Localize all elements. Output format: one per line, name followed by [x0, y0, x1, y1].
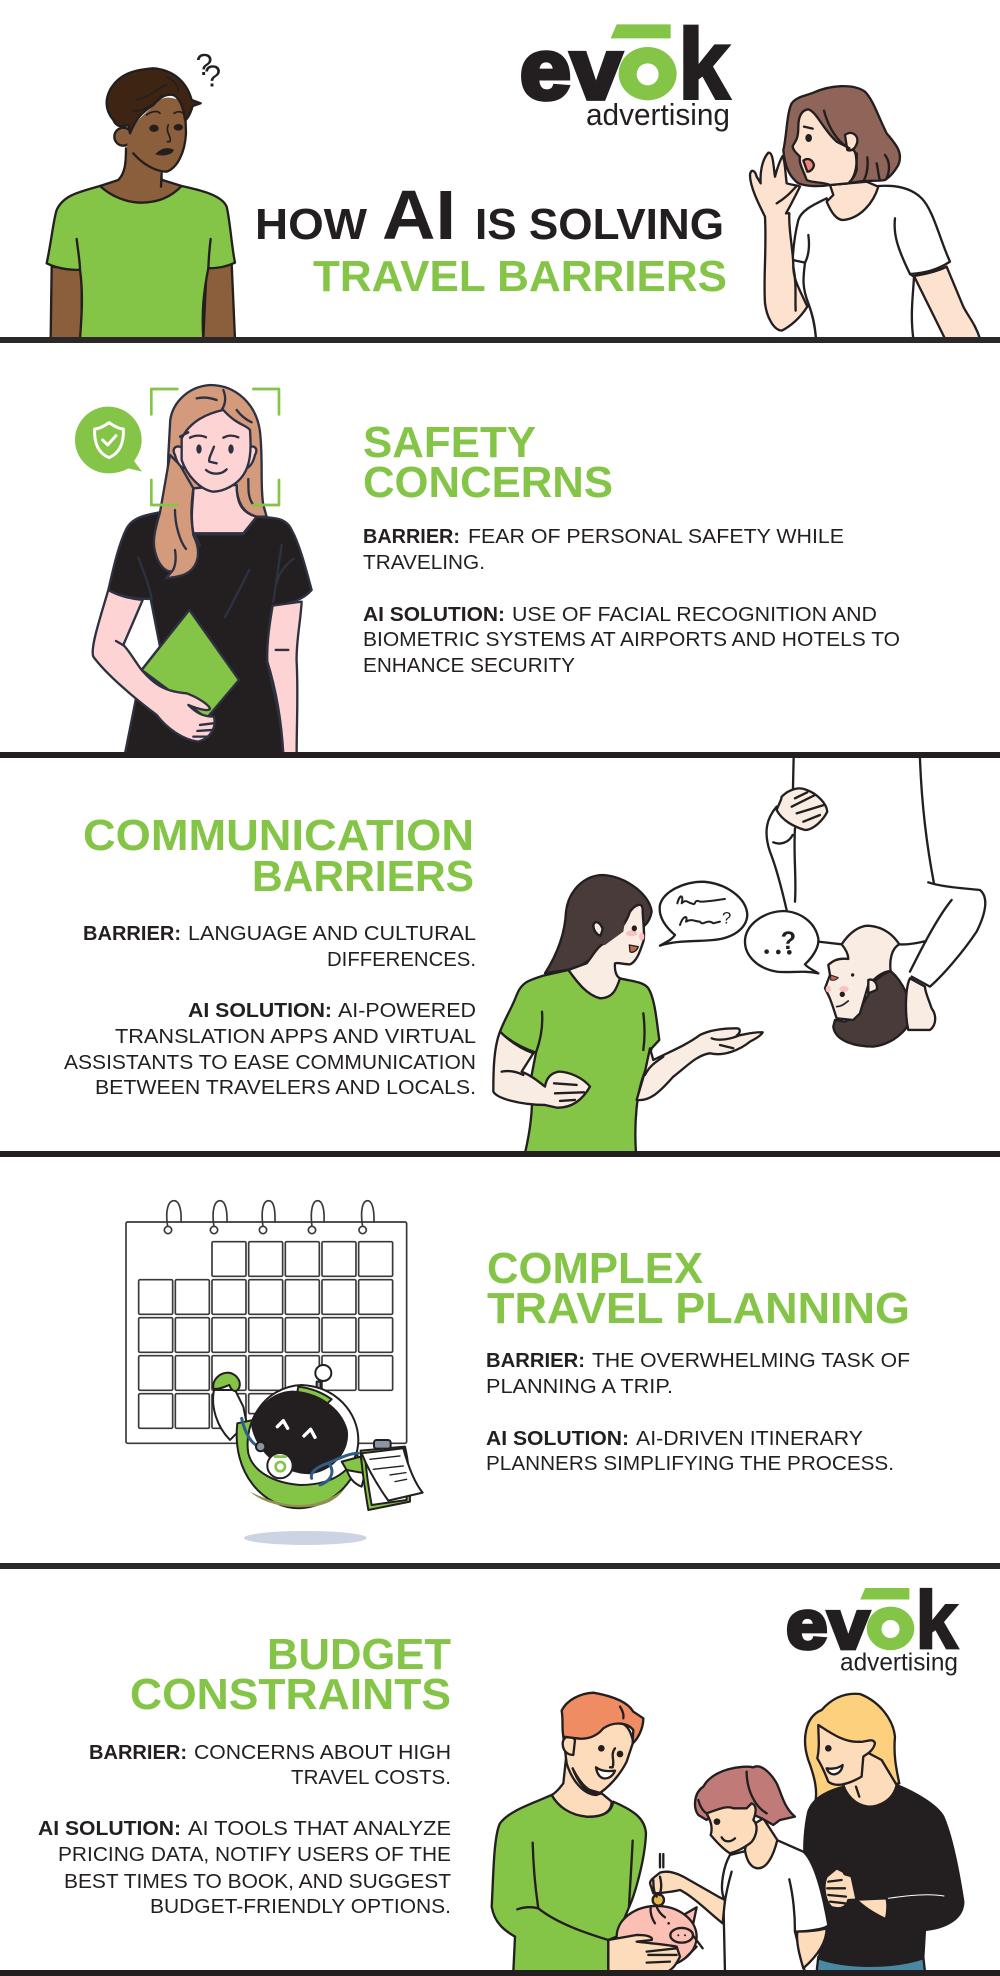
text: safety barrier: FEAR OF PERSONAL SAFETY WHILE — [468, 526, 844, 548]
logo wordmark: ev — [786, 1586, 870, 1664]
logo: evok advertising — [520, 8, 730, 132]
text: budget solution: BUDGET-FRIENDLY OPTIONS. — [150, 1896, 451, 1918]
text: budget barrier — [89, 1742, 451, 1789]
text: planning solution: AI-DRIVEN ITINERARY — [636, 1428, 863, 1450]
text: budget solution: PRICING DATA, NOTIFY USERS OF THE — [58, 1844, 451, 1866]
text: safety solution — [363, 604, 900, 677]
text: planning barrier: THE OVERWHELMING TASK OF — [592, 1350, 910, 1372]
logo tagline: advertising — [840, 1648, 958, 1676]
text: budget solution: AI SOLUTION: — [38, 1818, 181, 1840]
divider 4 — [0, 1563, 1000, 1569]
upside-down man — [767, 758, 985, 1047]
heading: complex travel planning: TRAVEL PLANNING — [487, 1285, 910, 1333]
woman in black — [804, 1694, 963, 1972]
text: communication barrier: BARRIER: — [83, 923, 181, 945]
speech bubble with question mark — [745, 911, 818, 973]
heading: budget constraints: BUDGET — [267, 1631, 451, 1679]
text: planning barrier: BARRIER: — [486, 1350, 585, 1372]
text: communication barrier: LANGUAGE AND CULTURAL — [188, 923, 476, 945]
girl in white — [650, 1766, 828, 1972]
text: safety solution: AI SOLUTION: — [363, 604, 505, 626]
divider 1 — [0, 337, 1000, 343]
text: communication solution: BETWEEN TRAVELERS AND LOCALS. — [95, 1077, 476, 1099]
heading: budget constraints — [130, 1631, 451, 1719]
text: planning barrier: PLANNING A TRIP. — [486, 1376, 673, 1398]
text: budget barrier: BARRIER: — [89, 1742, 187, 1764]
text: communication barrier — [83, 923, 476, 971]
logo green bar — [611, 24, 671, 38]
talking woman — [493, 875, 763, 1153]
text: safety barrier — [363, 526, 844, 574]
heading: safety concerns: CONCERNS — [363, 459, 613, 507]
shield speech bubble — [75, 407, 142, 473]
heading: communication barriers: BARRIERS — [252, 853, 474, 901]
text: planning barrier — [486, 1350, 910, 1398]
title — [255, 176, 727, 301]
logo ring — [867, 1607, 914, 1650]
piggy bank — [608, 1877, 703, 1972]
title: AI — [382, 176, 456, 254]
logo letter k: k — [678, 8, 730, 120]
heading: complex travel planning — [487, 1245, 910, 1333]
text: budget solution — [38, 1818, 451, 1918]
text: planning solution: AI SOLUTION: — [486, 1428, 629, 1450]
icon: confused man in green shirt — [47, 48, 235, 339]
man in green — [492, 1693, 646, 1972]
text: safety solution: USE OF FACIAL RECOGNITION AND — [512, 604, 877, 626]
icon: whispering woman — [750, 86, 980, 339]
logo letter k: k — [915, 1576, 958, 1667]
text: planning solution: PLANNERS SIMPLIFYING THE PROCESS. — [486, 1453, 894, 1475]
text: communication barrier: DIFFERENCES. — [327, 949, 476, 971]
heading: safety concerns: SAFETY — [363, 419, 536, 467]
text: budget solution: AI TOOLS THAT ANALYZE — [188, 1818, 451, 1840]
logo: evok advertising small — [786, 1576, 958, 1676]
heading: complex travel planning: COMPLEX — [487, 1245, 703, 1293]
title: HOW — [255, 201, 368, 249]
text: communication solution: AI SOLUTION: — [188, 1000, 332, 1022]
divider 2 — [0, 752, 1000, 758]
logo tagline: advertising — [586, 98, 730, 132]
logo ring — [619, 47, 677, 100]
text: safety solution: ENHANCE SECURITY — [363, 655, 575, 677]
icon: family with piggy bank — [492, 1693, 963, 1972]
speech bubble with scribble: ? — [722, 909, 731, 928]
icon: safety woman with face scan — [75, 385, 312, 754]
text: budget barrier: CONCERNS ABOUT HIGH — [194, 1742, 451, 1764]
divider 5 — [0, 1970, 1000, 1976]
text: budget barrier: TRAVEL COSTS. — [291, 1767, 451, 1789]
heading: communication barriers: COMMUNICATION — [83, 812, 474, 860]
heading: communication barriers — [83, 812, 474, 901]
face scan brackets — [151, 389, 279, 505]
calendar — [126, 1201, 407, 1443]
robot — [213, 1365, 423, 1545]
heading: budget constraints: CONSTRAINTS — [130, 1671, 451, 1719]
text: planning solution — [486, 1428, 894, 1475]
text: communication solution: ASSISTANTS TO EASE COMMUNICATION — [64, 1052, 476, 1074]
icon: confused man in green shirt: ? — [204, 60, 221, 94]
text: safety barrier: TRAVELING. — [363, 552, 485, 574]
logo wordmark: ev — [520, 22, 622, 117]
text: budget solution: BEST TIMES TO BOOK, AND SUGGEST — [64, 1871, 451, 1893]
logo green bar — [860, 1588, 909, 1600]
icon: confused man in green shirt: ? — [196, 48, 213, 82]
text: safety barrier: BARRIER: — [363, 526, 460, 548]
divider 3 — [0, 1151, 1000, 1157]
text: safety solution: BIOMETRIC SYSTEMS AT AIRPORTS AND HOTELS TO — [363, 629, 900, 651]
speech bubble with scribble — [660, 882, 747, 946]
text: communication solution: TRANSLATION APPS AND VIRTUAL — [115, 1026, 476, 1048]
text: communication solution — [64, 1000, 476, 1099]
text: communication solution: AI-POWERED — [338, 1000, 476, 1022]
speech bubble with question mark: ? — [781, 927, 796, 955]
title: IS SOLVING — [475, 201, 724, 249]
icon: woman talking to upside-down man — [493, 758, 985, 1153]
heading: safety concerns — [363, 419, 613, 507]
title: TRAVEL BARRIERS — [313, 253, 727, 301]
icon: calendar and robot — [126, 1201, 423, 1545]
